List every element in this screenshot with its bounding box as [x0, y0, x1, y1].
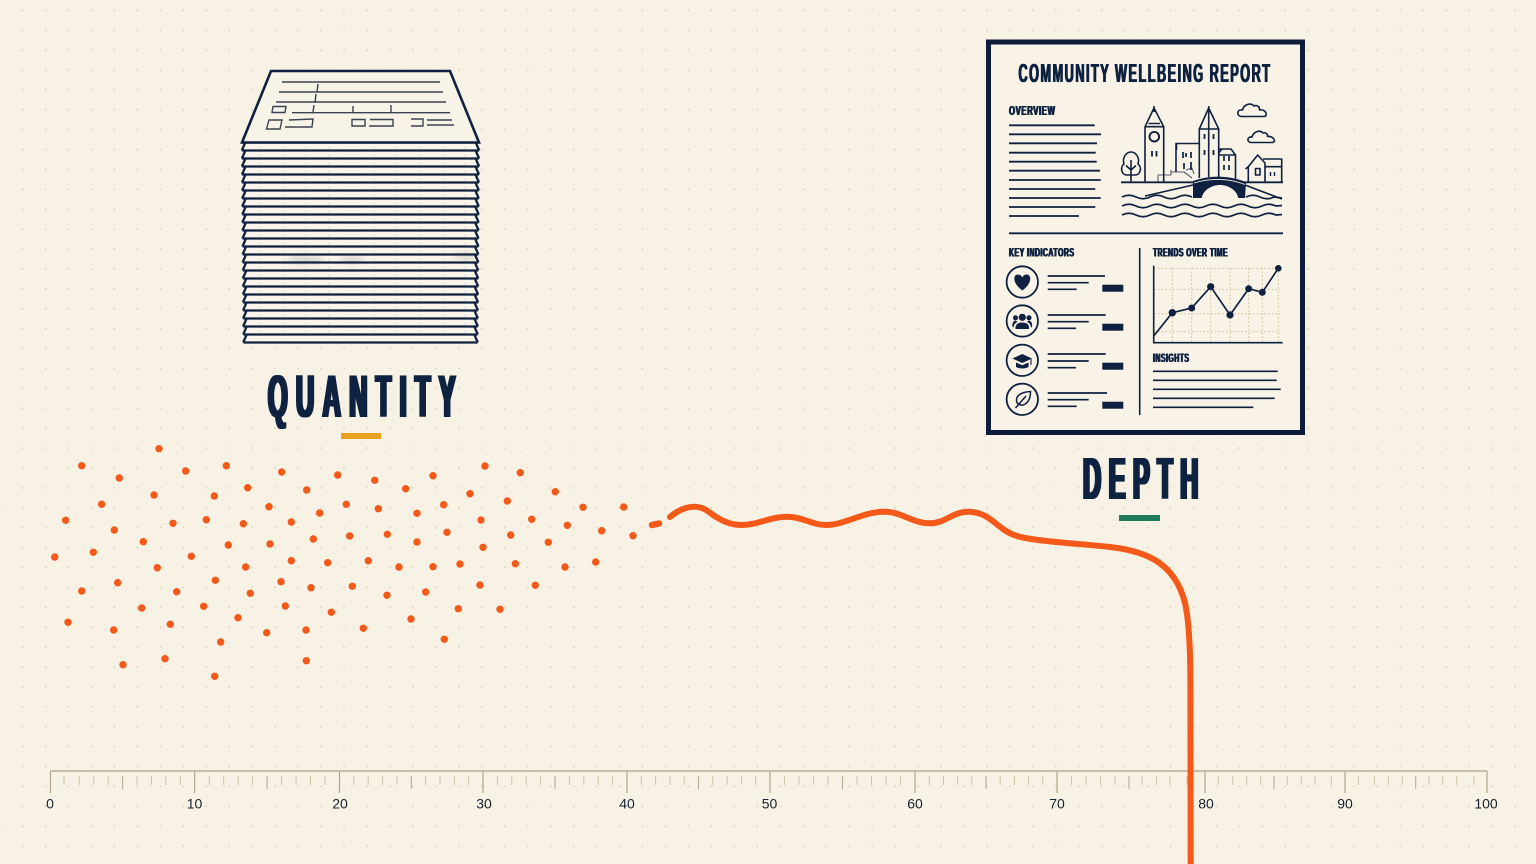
insights text lines [1153, 371, 1281, 407]
axis labels: 20 [332, 796, 348, 812]
axis labels [46, 796, 1498, 812]
ground line [1121, 181, 1283, 183]
section divider [1009, 232, 1283, 234]
axis labels: 30 [476, 796, 492, 812]
trends heading: TRENDS OVER TIME [1153, 246, 1228, 260]
clock tower [1145, 106, 1164, 182]
text: DEPTH [1083, 446, 1206, 512]
text: QUANTITY [268, 363, 464, 430]
tree [1122, 152, 1140, 182]
column divider [1139, 248, 1141, 415]
axis labels: 0 [46, 796, 54, 812]
overview text lines [1009, 125, 1101, 216]
line chart: trends over time [1154, 265, 1283, 343]
overview heading: OVERVIEW [1009, 104, 1056, 118]
indicator: environment [1007, 384, 1123, 415]
panel: community wellbeing report document [988, 42, 1302, 432]
orange line: wavering then dropping at 80 [652, 507, 1191, 864]
axis labels: 80 [1198, 796, 1214, 812]
ruler axis 0 to 100 [46, 771, 1498, 812]
icon: stack of paper forms [242, 71, 479, 342]
insights heading: INSIGHTS [1153, 352, 1190, 365]
axis labels: 70 [1049, 796, 1065, 812]
axis labels: 40 [619, 796, 635, 812]
river waves [1122, 195, 1282, 217]
accent bar: green [1119, 515, 1160, 521]
axis labels: 60 [907, 796, 923, 812]
panel: community wellbeing report document: COMMUNITY WELLBEING REPORT [1018, 60, 1272, 88]
bridge [1193, 177, 1246, 198]
accent bar: amber [341, 433, 381, 439]
axis labels: 100 [1474, 796, 1498, 812]
illustration: town with bridge [1121, 104, 1283, 217]
tall tower [1199, 106, 1219, 178]
axis labels: 90 [1337, 796, 1353, 812]
report frame [988, 42, 1302, 432]
key indicators heading: KEY INDICATORS [1009, 246, 1074, 260]
top sheet [242, 71, 479, 142]
stacked sheets [242, 142, 479, 342]
clouds [1238, 104, 1266, 116]
indicator: education [1007, 345, 1123, 376]
indicator: health [1007, 266, 1123, 298]
indicator: community [1007, 305, 1123, 337]
axis labels: 10 [187, 796, 202, 812]
scattered orange dots [51, 445, 637, 680]
house [1246, 155, 1282, 182]
axis labels: 50 [762, 796, 777, 812]
central buildings [1176, 143, 1236, 182]
